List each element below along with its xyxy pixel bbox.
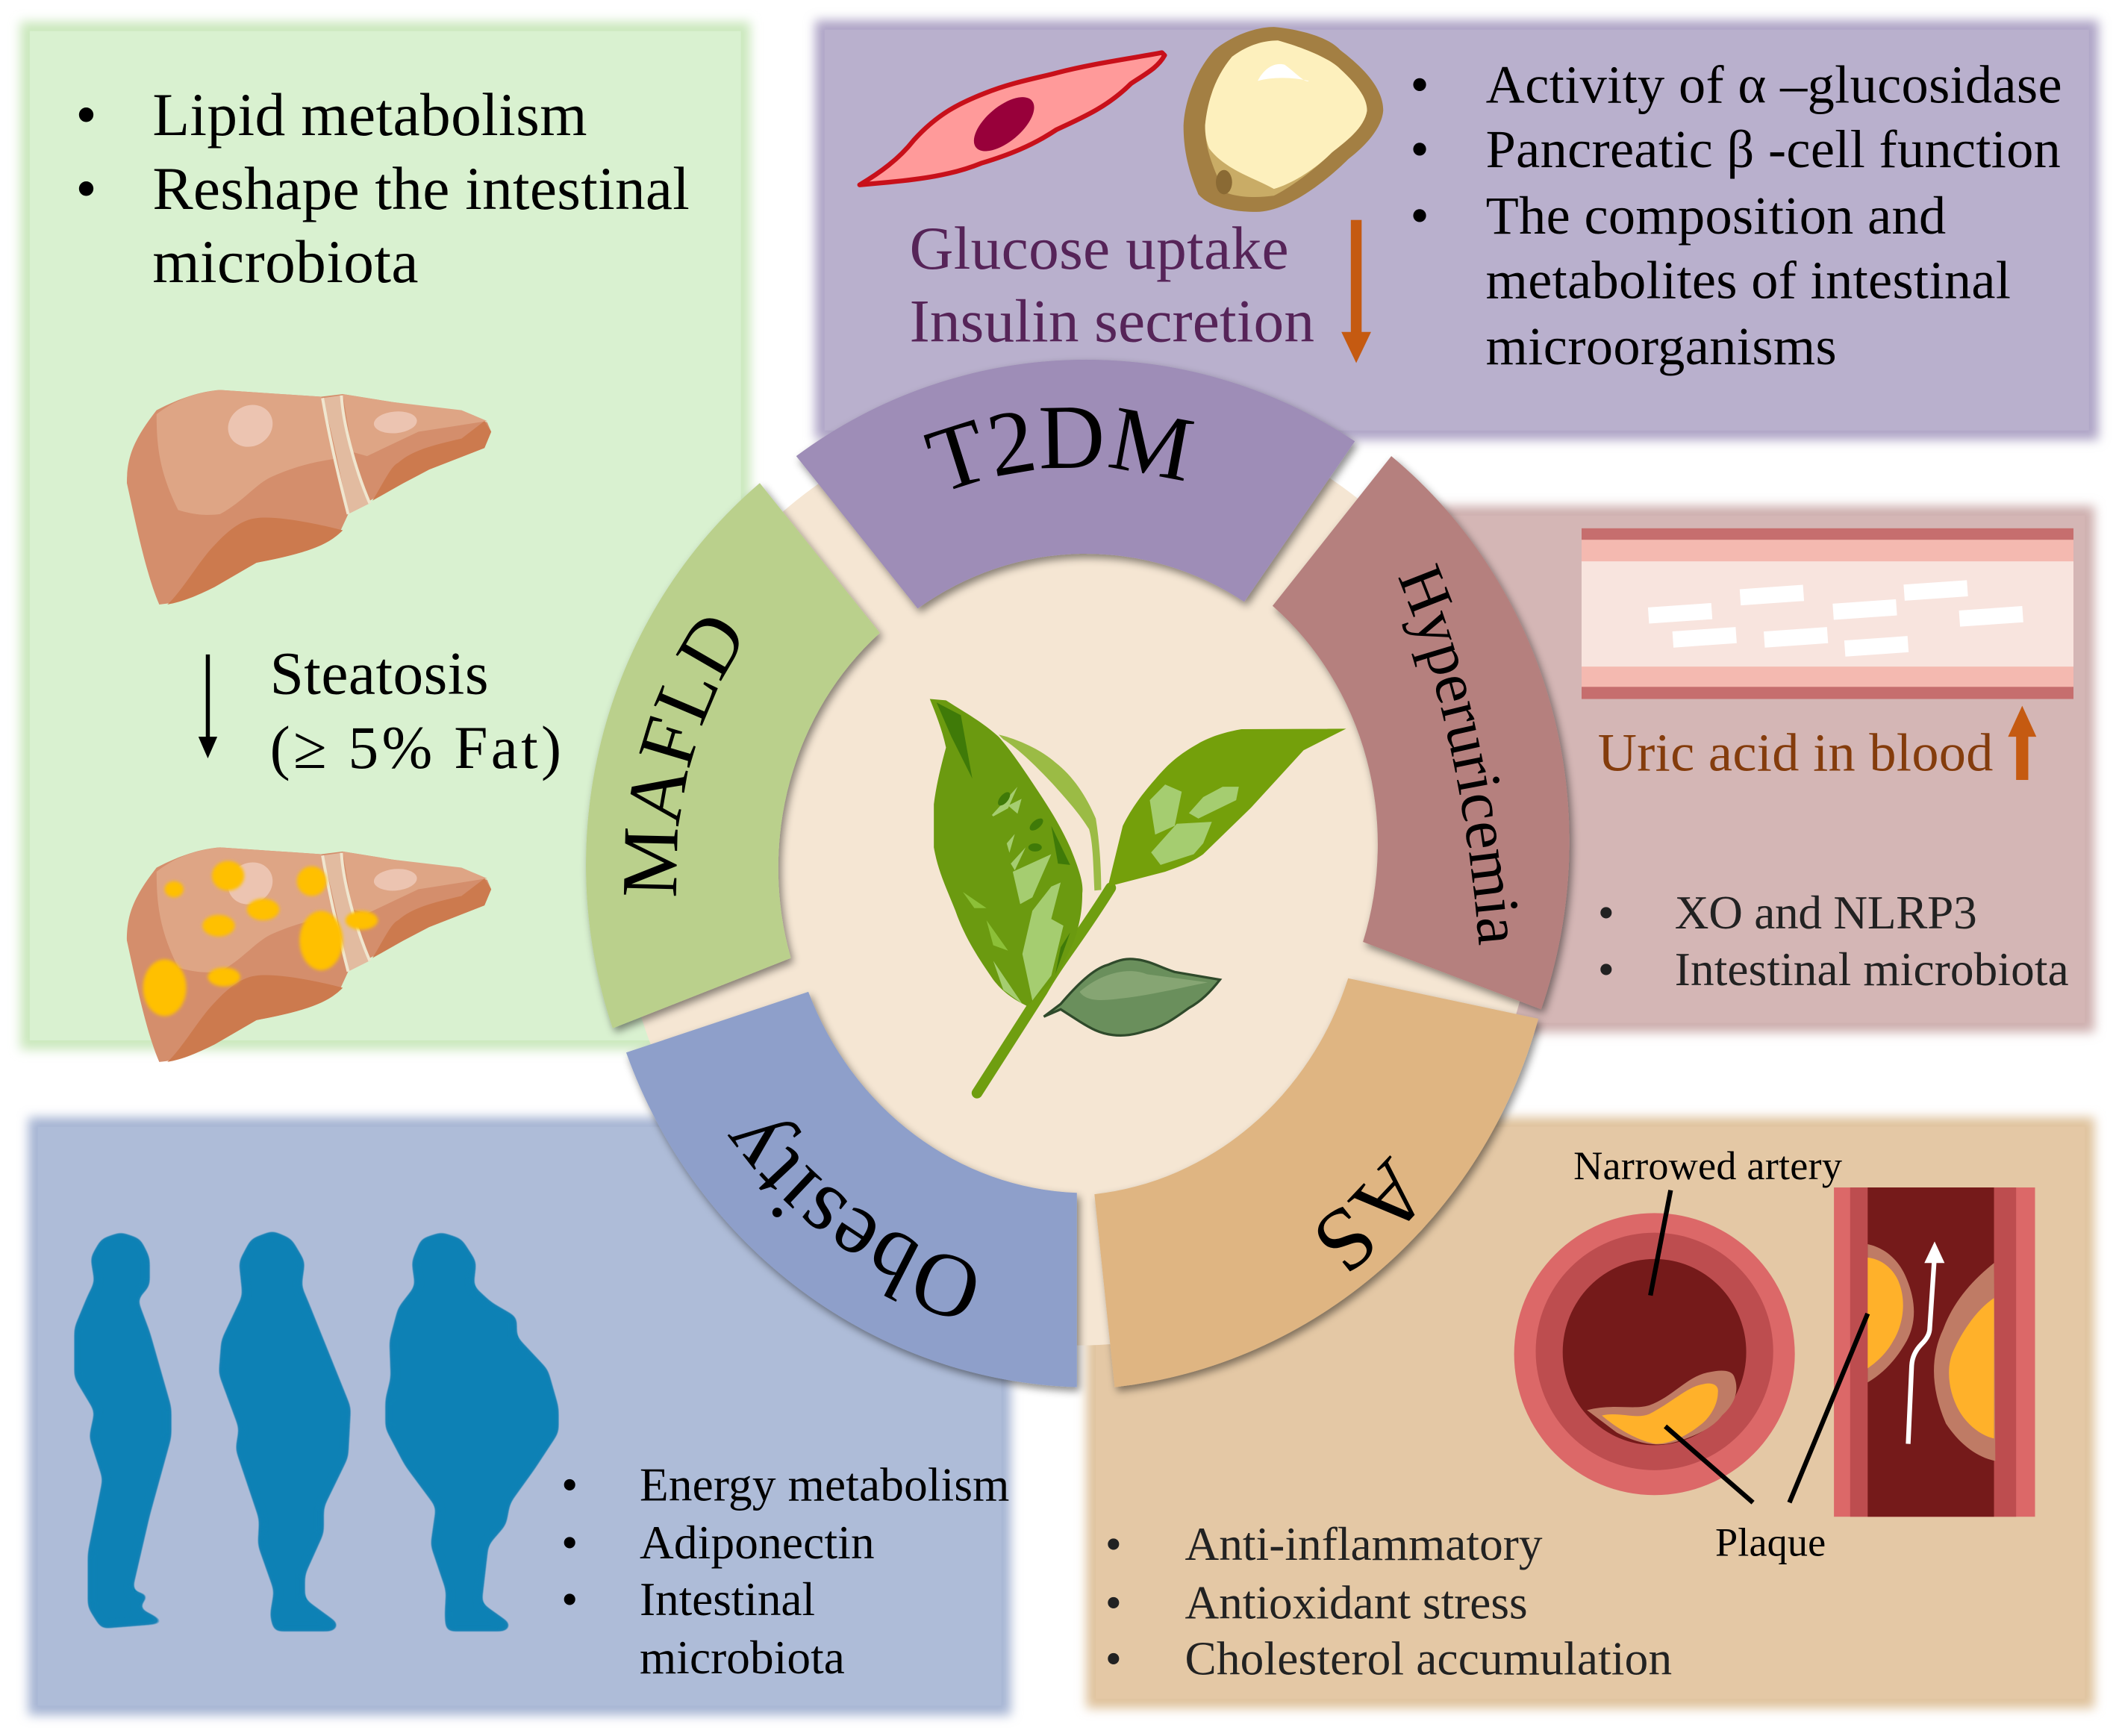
segment: MAFLD <box>583 483 886 1036</box>
callout lines <box>1650 1190 1867 1502</box>
label: glucose uptake and insulin secretion <box>910 214 1314 355</box>
bullet list: hyperuricemia mechanisms <box>1598 887 2069 996</box>
bullet list: obesity mechanisms: • <box>561 1459 578 1511</box>
label: plaque: Plaque <box>1715 1520 1826 1565</box>
bullet list: MAFLD mechanisms: • <box>75 154 97 222</box>
bullet list: hyperuricemia mechanisms: • <box>1598 887 1614 939</box>
bullet list: AS mechanisms: Cholesterol accumulation <box>1185 1633 1672 1685</box>
bullet list: MAFLD mechanisms: Lipid metabolism <box>152 81 587 149</box>
label: glucose uptake and insulin secretion: Insulin secretion <box>910 287 1314 355</box>
segment: Obesity: Obesity <box>727 1122 976 1317</box>
icon: healthy liver <box>127 390 491 605</box>
bullet list: hyperuricemia mechanisms: XO and NLRP3 <box>1675 887 1977 939</box>
panel: Obesity <box>28 1117 1011 1715</box>
segment: Obesity <box>625 991 1085 1396</box>
icon: tea leaves <box>930 699 1346 1093</box>
bullet list: AS mechanisms: • <box>1105 1577 1122 1629</box>
segment: Hyperuricemia: Hyperuricemia <box>1398 563 1518 945</box>
segment: T2DM: T2DM <box>924 408 1194 490</box>
bullet list: obesity mechanisms: microbiota <box>640 1632 845 1684</box>
bullet list: AS mechanisms: Anti-inflammatory <box>1185 1518 1543 1570</box>
bullet list: MAFLD mechanisms: • <box>75 81 97 149</box>
icon: artery cross section <box>1514 1213 1795 1495</box>
icon: fat cell <box>1184 27 1383 212</box>
icon: fatty liver <box>127 847 491 1062</box>
bullet list: T2DM mechanisms: • <box>1410 54 1429 114</box>
segment: MAFLD: MAFLD <box>624 618 739 896</box>
arrow: steatosis progression <box>199 655 217 758</box>
bullet list: T2DM mechanisms: microorganisms <box>1486 316 1837 376</box>
bullet list: AS mechanisms: • <box>1105 1633 1122 1685</box>
bullet list: obesity mechanisms <box>561 1459 1009 1684</box>
beige disc <box>619 401 1537 1346</box>
bullet list: MAFLD mechanisms: Reshape the intestinal <box>152 154 690 222</box>
icon: artery longitudinal section <box>1834 1187 2035 1517</box>
label: uric acid in blood: Uric acid in blood <box>1598 722 1993 782</box>
panel: Hyperuricemia <box>1349 506 2094 1032</box>
bullet list: AS mechanisms: • <box>1105 1518 1122 1570</box>
bullet list: AS mechanisms: Antioxidant stress <box>1185 1577 1528 1629</box>
bullet list: T2DM mechanisms <box>1410 54 2062 376</box>
bullet list: obesity mechanisms: Adiponectin <box>640 1517 875 1569</box>
bullet list: T2DM mechanisms: metabolites of intestinal <box>1486 251 2011 310</box>
bullet list: MAFLD mechanisms: microbiota <box>152 228 419 296</box>
bullet list: MAFLD mechanisms <box>75 81 690 296</box>
bullet list: hyperuricemia mechanisms: Intestinal microbiota <box>1675 943 2069 996</box>
segment: Hyperuricemia <box>1243 456 1577 1039</box>
panel: T2DM <box>815 20 2098 440</box>
bullet list: T2DM mechanisms: • <box>1410 186 1429 246</box>
bullet list: AS mechanisms <box>1105 1518 1672 1685</box>
label: steatosis <box>270 639 561 781</box>
panel: MAFLD <box>20 22 750 1062</box>
panel: AS <box>1086 1117 2094 1708</box>
segment: AS: AS <box>1318 1155 1415 1272</box>
icon: muscle cell <box>860 53 1164 185</box>
central wheel <box>583 358 1577 1396</box>
label: steatosis: Steatosis <box>270 639 489 707</box>
segment: AS <box>1093 958 1545 1396</box>
bullet list: obesity mechanisms: • <box>561 1517 578 1569</box>
bullet list: T2DM mechanisms: Activity of α –glucosidase <box>1486 54 2062 114</box>
icon: three body silhouettes <box>74 1231 559 1632</box>
bullet list: T2DM mechanisms: The composition and <box>1486 186 1946 246</box>
label: narrowed artery: Narrowed artery <box>1573 1143 1842 1188</box>
label: glucose uptake and insulin secretion: Glucose uptake <box>910 214 1289 282</box>
label: steatosis: (≥ 5% Fat) <box>270 714 561 781</box>
bullet list: obesity mechanisms: Energy metabolism <box>640 1459 1009 1511</box>
bullet list: hyperuricemia mechanisms: • <box>1598 943 1614 996</box>
bullet list: T2DM mechanisms: Pancreatic β -cell function <box>1486 119 2061 179</box>
icon: blood vessel with urate crystals <box>1582 528 2073 699</box>
arrow: decrease <box>1341 220 1371 363</box>
bullet list: T2DM mechanisms: • <box>1410 119 1429 179</box>
segment: T2DM <box>796 358 1361 616</box>
bullet list: obesity mechanisms: Intestinal <box>640 1573 815 1626</box>
bullet list: obesity mechanisms: • <box>561 1573 578 1626</box>
arrow: increase <box>2008 706 2036 780</box>
